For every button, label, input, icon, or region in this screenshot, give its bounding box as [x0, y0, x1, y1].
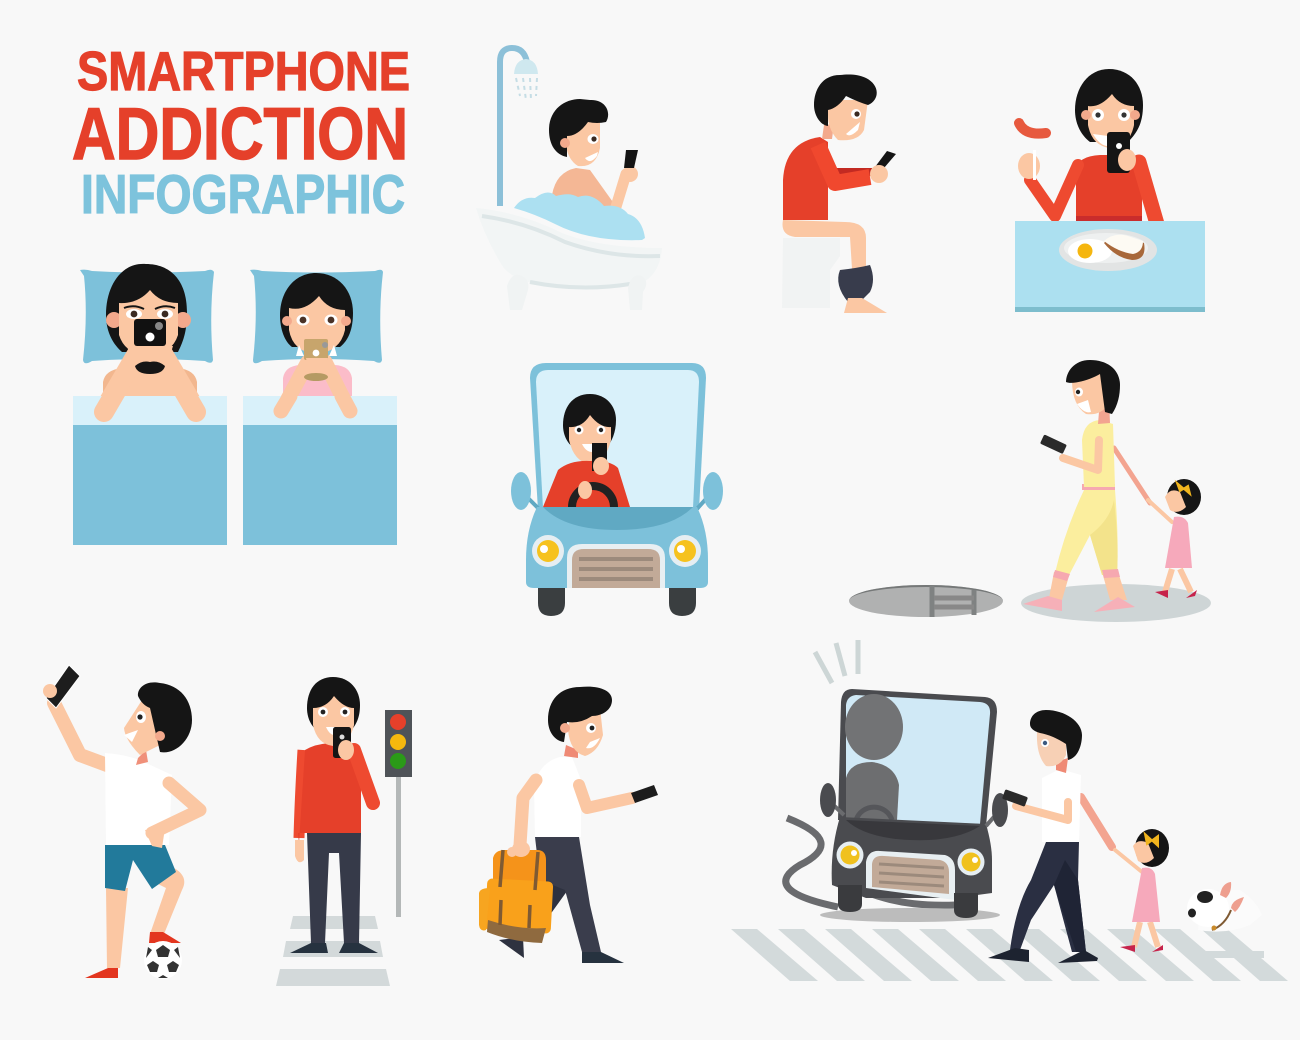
side mirrors — [820, 783, 1008, 827]
scene: phone while driving — [511, 363, 723, 616]
scene: selfie with football — [43, 665, 200, 979]
sweater and arms — [295, 743, 361, 862]
foot — [844, 298, 887, 313]
hand — [145, 828, 165, 848]
scene: pedestrian at traffic light — [276, 677, 412, 986]
woman body and face — [280, 273, 353, 396]
girl — [1115, 829, 1169, 952]
father — [988, 710, 1112, 963]
shirt — [105, 753, 172, 845]
table — [1015, 221, 1205, 312]
shoes — [85, 932, 181, 978]
pillow — [250, 270, 383, 363]
phone — [631, 785, 658, 803]
scene: walking towards open manhole — [849, 360, 1211, 622]
mouth — [135, 362, 165, 374]
mother — [1023, 360, 1150, 612]
title: INFOGRAPHIC — [81, 163, 405, 225]
panel: right bed sheet — [243, 396, 397, 545]
windscreen frame — [838, 689, 997, 826]
side mirrors — [511, 472, 723, 510]
shorts — [105, 845, 176, 891]
windscreen frame — [530, 363, 706, 510]
torso — [783, 137, 828, 220]
rolled trousers — [838, 265, 873, 302]
driver silhouette — [845, 694, 903, 820]
fork hand — [1018, 150, 1040, 180]
dark inner sleeve — [830, 168, 872, 178]
scene: man using phone in bed — [80, 264, 214, 410]
sausage — [1019, 123, 1046, 134]
dog — [1187, 882, 1262, 932]
head — [548, 687, 612, 758]
head — [124, 682, 192, 765]
raised arm — [54, 703, 107, 765]
headlights — [836, 842, 984, 876]
car body — [832, 817, 992, 898]
arms and hands — [104, 352, 196, 410]
shoes — [290, 943, 378, 953]
windscreen glass — [846, 695, 990, 824]
trousers — [307, 833, 361, 943]
phone and hand — [1107, 132, 1136, 173]
arm on hip — [152, 783, 200, 833]
grille — [866, 851, 955, 900]
pillow — [80, 270, 214, 363]
scene: phone in the bath — [476, 48, 662, 310]
scene: woman using phone in bed — [250, 270, 383, 412]
headlights — [532, 535, 701, 567]
leg — [782, 220, 866, 285]
phone — [43, 665, 80, 708]
back leg and lifted leg — [106, 866, 184, 968]
scene: phone at breakfast table — [1015, 69, 1205, 312]
scene: phone on the toilet — [782, 74, 896, 313]
panel: left bed sheet — [73, 388, 227, 545]
hood shade — [543, 507, 693, 530]
hands — [306, 358, 328, 375]
wheels — [538, 588, 696, 616]
head — [307, 677, 360, 746]
bathtub — [476, 208, 662, 310]
phone — [304, 339, 328, 360]
arms — [520, 780, 632, 845]
arm — [818, 145, 870, 183]
ground shadow — [1021, 584, 1211, 622]
toilet — [782, 238, 840, 308]
man in bath — [549, 99, 638, 210]
phone and arm — [333, 727, 373, 803]
plate of food — [1059, 229, 1157, 271]
shower — [500, 48, 538, 206]
hood shade — [846, 820, 980, 840]
hands — [127, 346, 173, 365]
scene: walking with backpack — [479, 687, 658, 963]
shirt — [534, 757, 581, 837]
skid marks — [786, 818, 956, 907]
shock lines — [815, 640, 858, 683]
woman — [1030, 69, 1157, 224]
back leg and shoe — [499, 880, 575, 958]
title: ADDICTION — [72, 94, 408, 175]
neck and face — [814, 74, 877, 140]
title: SMARTPHONE — [77, 40, 410, 102]
hand and phone — [870, 151, 896, 183]
trousers — [535, 837, 601, 952]
football — [144, 941, 182, 979]
wheels — [838, 885, 978, 918]
car body — [526, 507, 708, 588]
backpack — [479, 841, 553, 943]
scene: car almost hits distracted father — [731, 640, 1288, 981]
crosswalk — [731, 929, 1288, 981]
crossing stripes — [276, 916, 390, 986]
girl — [1148, 479, 1201, 598]
phone — [134, 319, 166, 346]
foam — [514, 192, 645, 240]
manhole — [849, 585, 1003, 617]
arms — [281, 362, 350, 412]
grille — [567, 544, 665, 588]
car shadow — [820, 908, 1000, 922]
shoe — [582, 952, 624, 963]
driver — [543, 394, 630, 507]
man body and face — [103, 264, 197, 396]
mouth — [304, 373, 328, 381]
title — [72, 40, 410, 225]
windscreen glass — [536, 370, 699, 508]
traffic light — [385, 710, 412, 917]
